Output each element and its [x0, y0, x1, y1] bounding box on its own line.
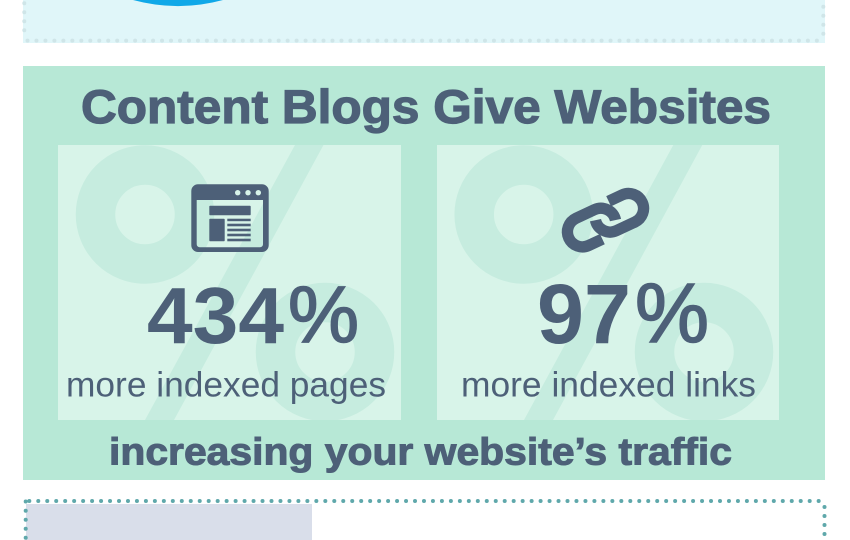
bottom panel [24, 499, 830, 540]
subheading: increasing your website’s traffic [109, 432, 732, 474]
stat: 434%: 434 [147, 271, 285, 360]
label: more indexed links: more indexed links [461, 366, 756, 404]
stat: 434% [147, 270, 359, 360]
stat: 97%: % [635, 266, 709, 360]
panel: content blogs [23, 66, 825, 480]
icon: blue circle [133, 0, 223, 6]
card: indexed links [437, 145, 779, 420]
card: indexed pages [58, 145, 401, 420]
top panel [22, 0, 828, 43]
stat: 434%: % [288, 270, 359, 359]
background percent sign [96, 145, 374, 420]
stat: 97% [537, 266, 709, 361]
background percent sign [474, 145, 754, 420]
stat: 97%: 97 [537, 267, 631, 361]
icon: browser window [191, 184, 269, 252]
heading: Content Blogs Give Websites [81, 80, 771, 133]
label: more indexed pages: more indexed pages [66, 366, 386, 404]
icon: chain link [563, 189, 648, 252]
